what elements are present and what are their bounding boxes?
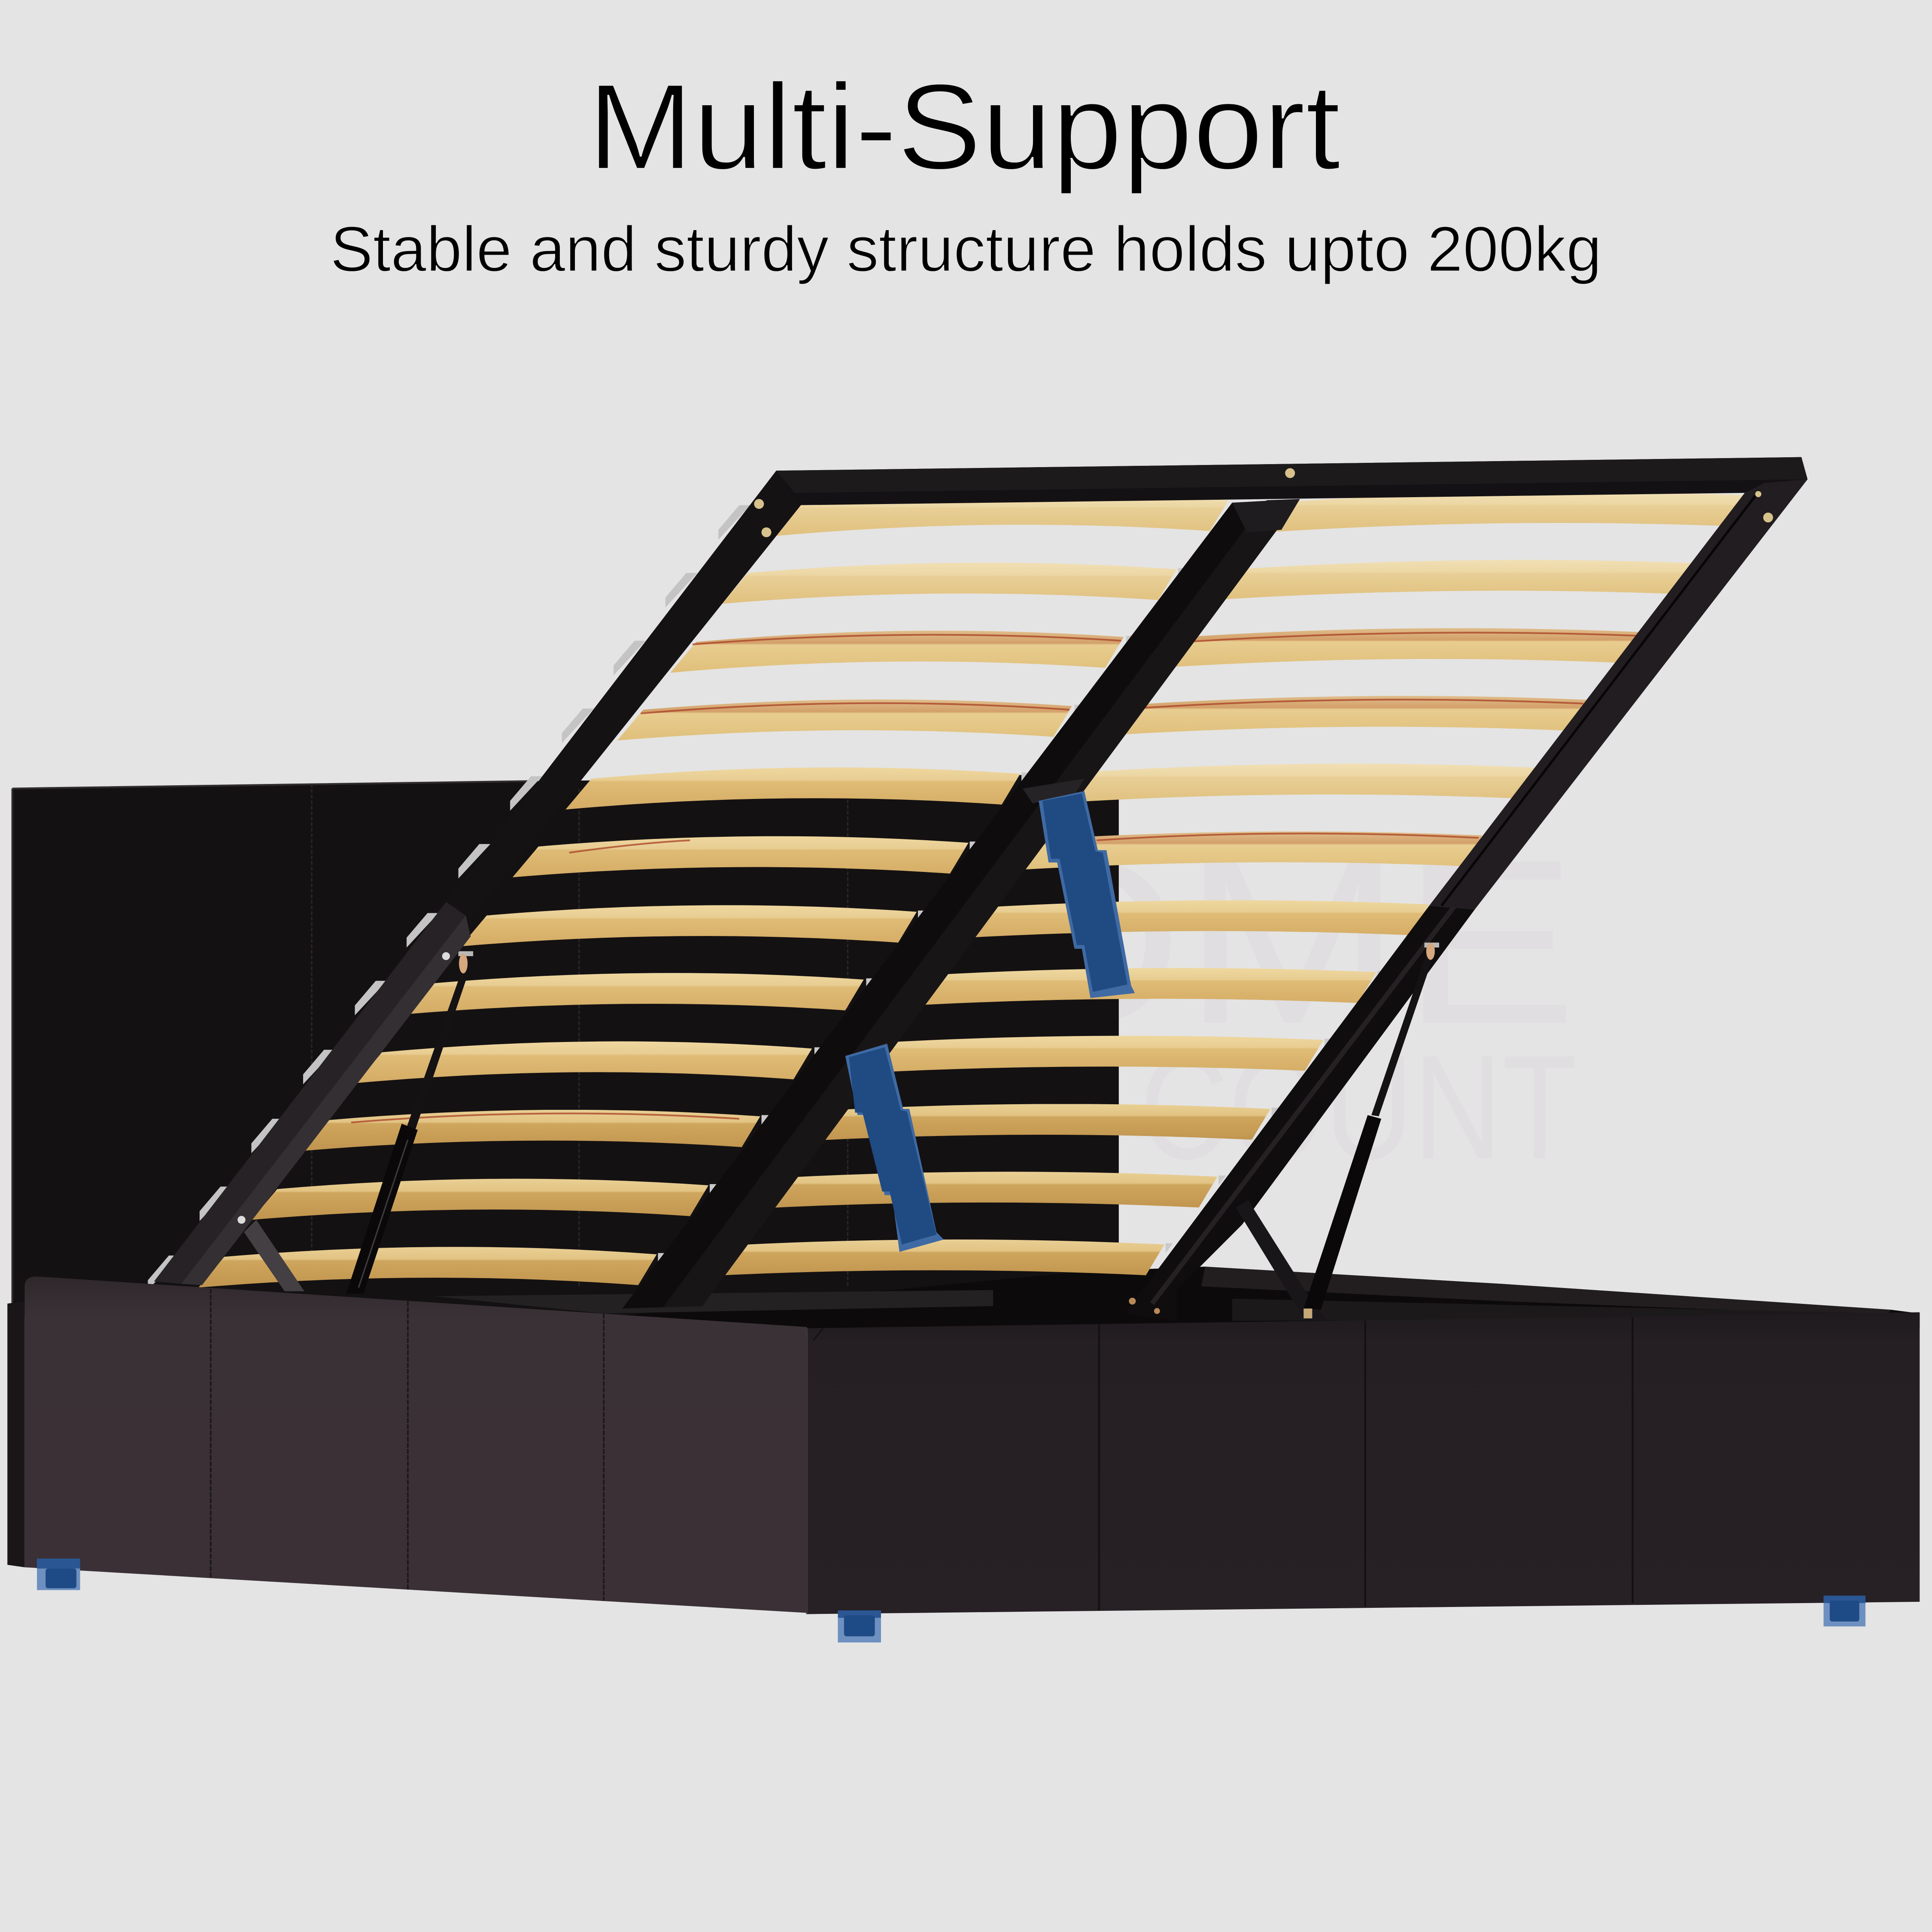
watermark: HOME (789, 811, 1577, 1072)
slats (198, 492, 1747, 1288)
left rail studs (148, 505, 750, 1290)
slat clips (658, 562, 1703, 1263)
foot: centre (838, 1610, 881, 1643)
wood grain streaks (351, 632, 1639, 1122)
foot: left (37, 1558, 80, 1590)
headboard (12, 774, 1119, 1318)
bed illustration (7, 457, 1920, 1643)
watermark: COUNT (1140, 1024, 1577, 1190)
left gas strut (346, 951, 473, 1294)
right frame rail (1125, 479, 1807, 1321)
bed base side panel (7, 1276, 807, 1613)
top frame rail (754, 457, 1807, 537)
title: Multi-Support (588, 59, 1341, 195)
watermark (789, 811, 1577, 1190)
centre support rail (622, 499, 1300, 1309)
foot: right (1823, 1596, 1865, 1626)
subtitle: Stable and sturdy structure holds upto 200kg (330, 213, 1602, 285)
blue centre support leg lower (845, 1044, 944, 1252)
right gas strut (1303, 942, 1439, 1318)
blue centre support leg upper (1039, 791, 1135, 998)
right gas strut support arm (1236, 1200, 1327, 1320)
left frame rail (154, 471, 801, 1285)
back rail and base interior (434, 1267, 1920, 1336)
left gas strut support arm (244, 1220, 304, 1291)
bed base front panel (807, 1312, 1920, 1614)
